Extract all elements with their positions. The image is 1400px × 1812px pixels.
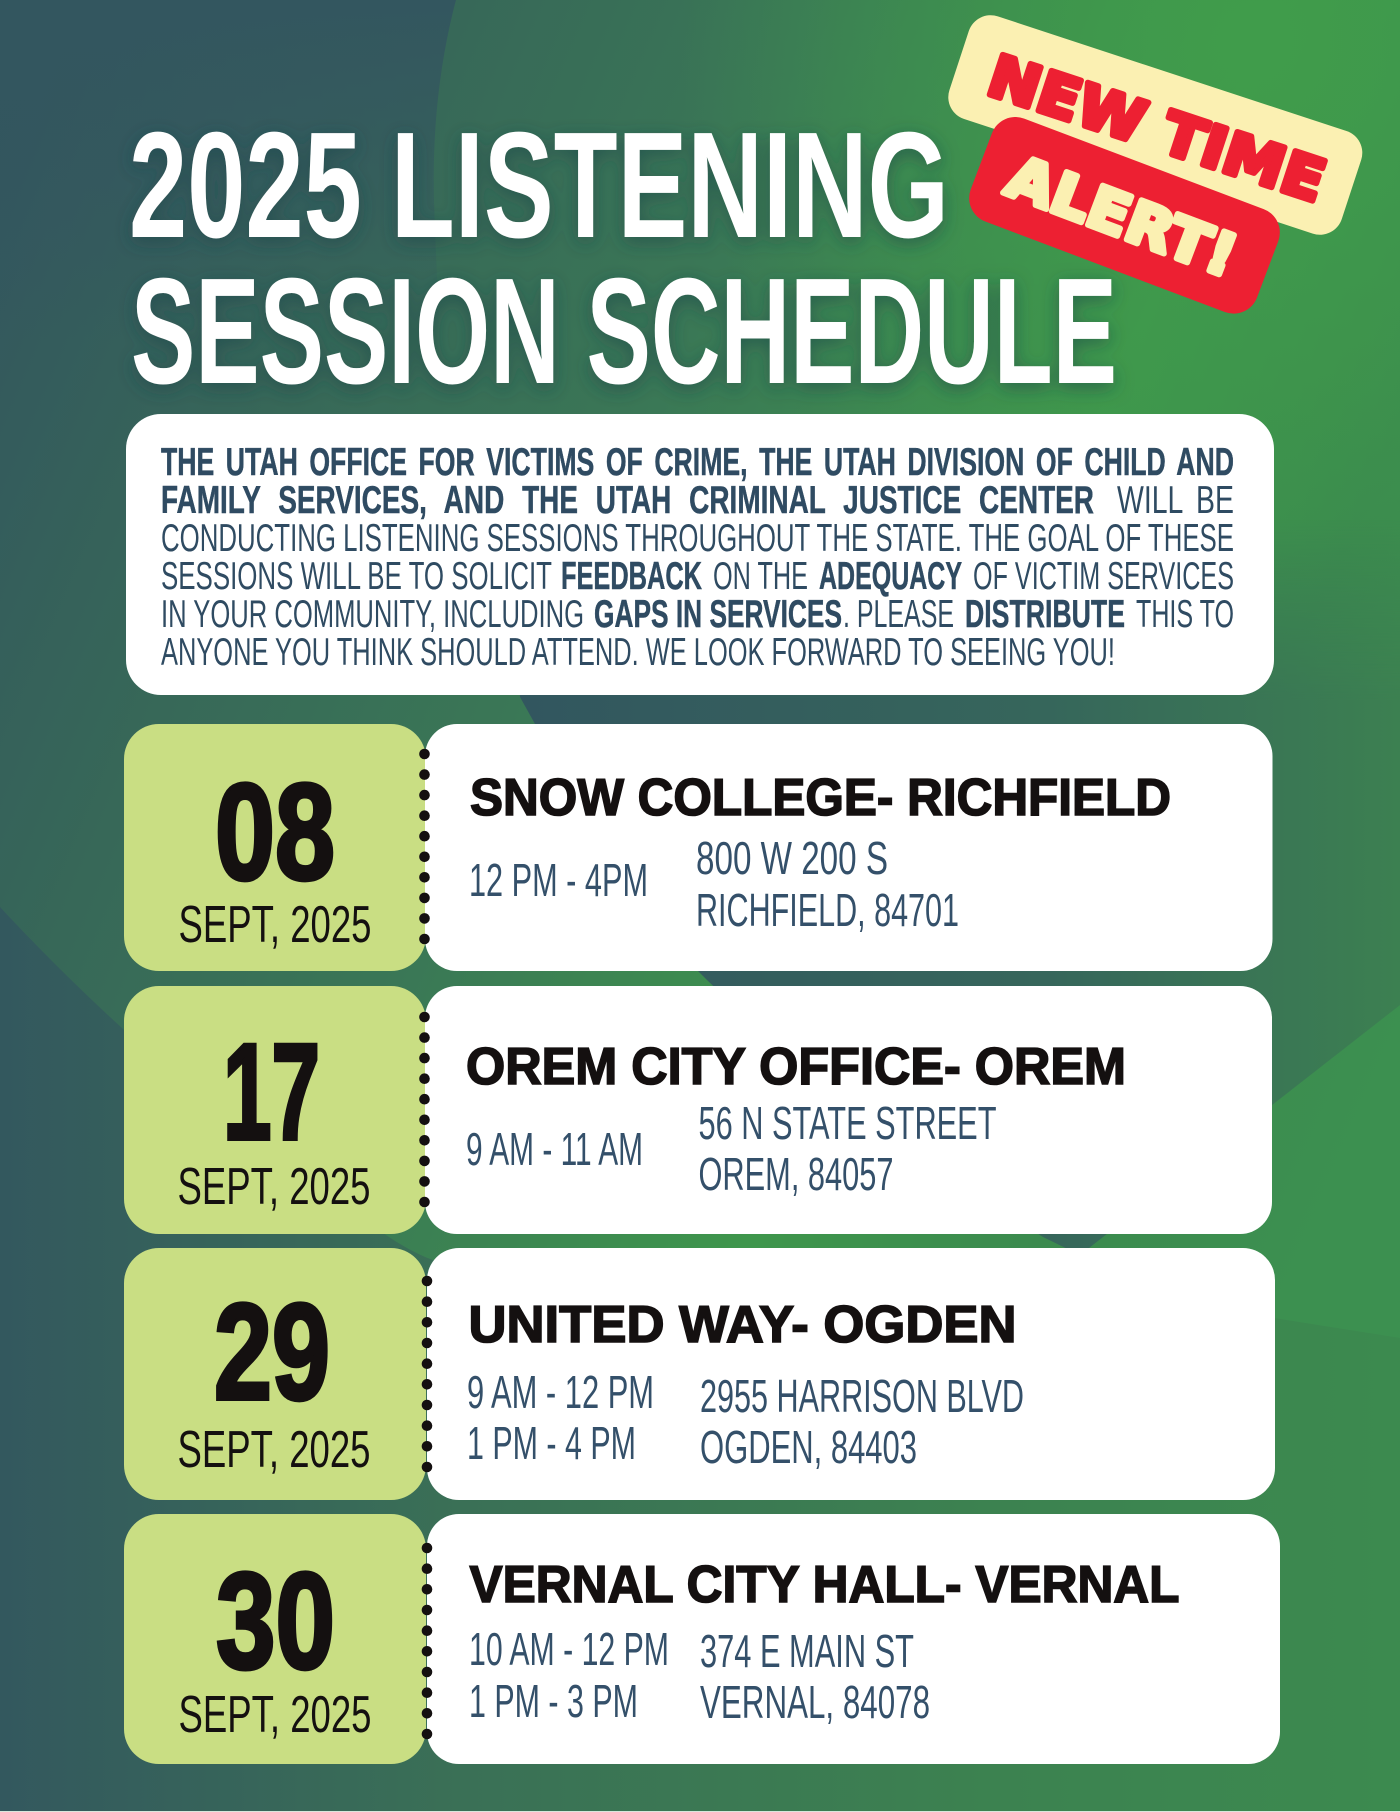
date tab: 17 [223,1016,320,1169]
date tab [124,1248,426,1500]
details card: OREM CITY OFFICE- OREM [466,1038,1126,1096]
details card: UNITED WAY- OGDEN [468,1296,1016,1354]
perforation dots [422,1543,432,1739]
details card: VERNAL CITY HALL- VERNAL [470,1556,1180,1614]
panel: introduction: IN YOUR COMMUNITY, INCLUDING [161,593,584,636]
details card: 800 W 200 S [696,832,888,884]
date tab: 08 [215,756,335,909]
details card: SNOW COLLEGE- RICHFIELD [470,769,1171,827]
perforation dots [419,1012,430,1207]
date tab: SEPT, 2025 [178,1686,372,1744]
date tab [124,1514,426,1764]
badge: new time [942,9,1368,241]
badge: alert [962,110,1287,321]
panel: introduction [126,414,1274,695]
date tab: SEPT, 2025 [178,1158,370,1216]
date tab [124,724,426,971]
session: Snow College, Richfield [124,724,1272,971]
title: 2025 LISTENING [129,100,949,269]
panel: introduction: ADEQUACY [819,555,962,598]
details card: OREM, 84057 [698,1148,894,1200]
badge: alert: ALERT! [998,142,1246,291]
details card: 2955 HARRISON BLVD [700,1370,1024,1422]
panel: introduction: DISTRIBUTE [965,593,1125,636]
date tab: SEPT, 2025 [178,1421,370,1479]
details card [425,986,1272,1234]
details card [425,724,1272,971]
session: Orem City Office, Orem [124,986,1272,1234]
panel: introduction: OF VICTIM SERVICES [973,555,1234,598]
details card: 9 AM - 11 AM [466,1123,643,1175]
details card [427,1514,1280,1764]
details card: 56 N STATE STREET [698,1097,996,1149]
details card: OGDEN, 84403 [700,1421,917,1473]
panel: introduction: GAPS IN SERVICES [594,593,842,636]
session: Vernal City Hall, Vernal [124,1514,1280,1764]
details card [427,1248,1275,1500]
panel: introduction: ON THE [713,555,808,598]
title [129,100,1117,415]
details card: 1 PM - 3 PM [469,1675,638,1727]
perforation dots [422,1276,432,1472]
date tab: SEPT, 2025 [178,896,372,954]
panel: introduction: FEEDBACK [561,555,702,598]
perforation dots [419,749,430,944]
details card: RICHFIELD, 84701 [696,884,959,936]
panel: introduction: . PLEASE [843,593,954,636]
details card: 12 PM - 4PM [469,854,648,906]
date tab: 29 [214,1276,330,1429]
details card: 10 AM - 12 PM [469,1623,669,1675]
details card: VERNAL, 84078 [700,1676,930,1728]
panel: introduction: SESSIONS WILL BE TO SOLICIT [161,555,552,598]
badge: new time: NEW TIME [980,42,1334,216]
details card: 374 E MAIN ST [700,1625,914,1677]
session: United Way, Ogden [124,1248,1275,1500]
date tab [124,986,426,1234]
badge: new time alert [942,9,1368,321]
details card: 1 PM - 4 PM [467,1417,636,1469]
date tab: 30 [216,1545,335,1698]
panel: introduction: WILL BE [1117,479,1234,522]
details card: 9 AM - 12 PM [467,1366,654,1418]
panel: introduction: THIS TO [1136,593,1234,636]
